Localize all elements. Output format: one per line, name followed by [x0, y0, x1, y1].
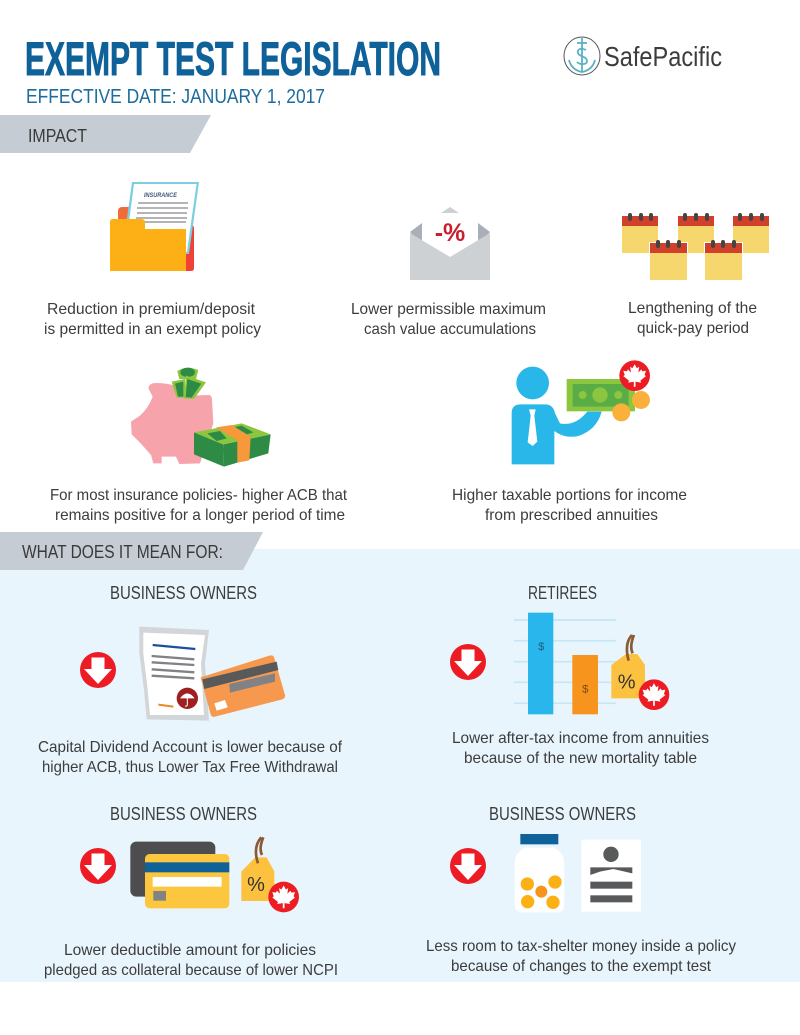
caption: cash value accumulations — [364, 321, 536, 338]
caption — [452, 487, 687, 524]
caption — [50, 487, 348, 524]
caption: Reduction in premium/deposit — [47, 301, 256, 318]
panel: what does it mean for — [0, 532, 800, 982]
panel background — [0, 549, 800, 982]
heading band: what does it mean for — [0, 532, 263, 570]
impact item: premium reduction — [44, 182, 261, 338]
icon: bar chart with tag: % — [618, 671, 636, 693]
caption: Less room to tax-shelter money inside a policy — [426, 938, 736, 955]
icon: policy document and card — [139, 627, 285, 721]
caption — [426, 938, 736, 975]
caption: pledged as collateral because of lower NCPI — [44, 962, 338, 979]
logo: SafePacific: SafePacific — [604, 41, 722, 72]
caption: Lower deductible amount for policies — [64, 942, 316, 959]
heading: BUSINESS OWNERS — [110, 804, 257, 824]
icon: down arrow — [80, 848, 116, 884]
page header — [25, 32, 722, 108]
caption: quick-pay period — [637, 320, 749, 337]
group: retirees — [450, 583, 709, 767]
icon: bar chart with tag: $ — [582, 684, 589, 696]
heading: RETIREES — [528, 583, 597, 603]
icon: down arrow — [80, 652, 116, 688]
icon: calendars — [622, 213, 769, 281]
icon: piggy bank with cash — [131, 368, 271, 467]
icon: envelope with minus percent: -% — [435, 219, 465, 247]
heading band: impact: IMPACT — [28, 125, 87, 146]
icon: coin jar and document — [515, 834, 641, 912]
icon: envelope with minus percent — [410, 207, 490, 280]
caption: Capital Dividend Account is lower because of — [38, 739, 343, 756]
logo: SafePacific — [564, 37, 722, 75]
impact item: higher ACB — [50, 368, 348, 524]
caption: Higher taxable portions for income — [452, 487, 687, 504]
icon: insurance folder — [110, 182, 199, 271]
subtitle: effective date: EFFECTIVE DATE: JANUARY 1, 2017 — [26, 86, 325, 108]
caption: For most insurance policies- higher ACB that — [50, 487, 348, 504]
icon: bar chart with tag: $ — [538, 641, 545, 653]
caption — [628, 300, 757, 337]
heading band: impact — [0, 115, 211, 153]
caption: is permitted in an exempt policy — [44, 321, 261, 338]
icon: person with banknote — [512, 360, 650, 464]
caption: Lower after-tax income from annuities — [452, 730, 709, 747]
caption — [38, 739, 343, 776]
caption: Lengthening of the — [628, 300, 757, 317]
icon: down arrow — [450, 644, 486, 680]
icon: credit cards with tag: % — [247, 874, 265, 896]
group: business owners, deductible amount — [44, 804, 338, 979]
impact item: quick-pay period — [622, 213, 769, 337]
caption: because of the new mortality table — [464, 750, 697, 767]
heading: BUSINESS OWNERS — [110, 583, 257, 603]
heading: BUSINESS OWNERS — [489, 804, 636, 824]
group: business owners, capital dividend — [38, 583, 343, 776]
caption: because of changes to the exempt test — [451, 958, 712, 975]
icon: down arrow — [450, 848, 486, 884]
icon: insurance folder: INSURANCE — [144, 192, 178, 199]
caption: Lower permissible maximum — [351, 301, 546, 318]
title: EXEMPT TEST LEGISLATION — [25, 32, 441, 85]
caption — [351, 301, 546, 338]
caption: from prescribed annuities — [485, 507, 658, 524]
panel: impact — [0, 115, 769, 524]
impact item: prescribed annuities — [452, 360, 687, 524]
caption — [44, 942, 338, 979]
caption: higher ACB, thus Lower Tax Free Withdrawal — [42, 759, 338, 776]
icon: credit cards with tag — [130, 837, 299, 912]
caption: remains positive for a longer period of time — [55, 507, 345, 524]
caption — [452, 730, 709, 767]
caption — [44, 301, 261, 338]
icon: bar chart with tag — [514, 613, 669, 714]
heading band: what does it mean for: WHAT DOES IT MEAN FOR: — [22, 542, 223, 562]
impact item: cash value — [351, 207, 546, 338]
group: business owners, tax shelter — [426, 804, 736, 975]
